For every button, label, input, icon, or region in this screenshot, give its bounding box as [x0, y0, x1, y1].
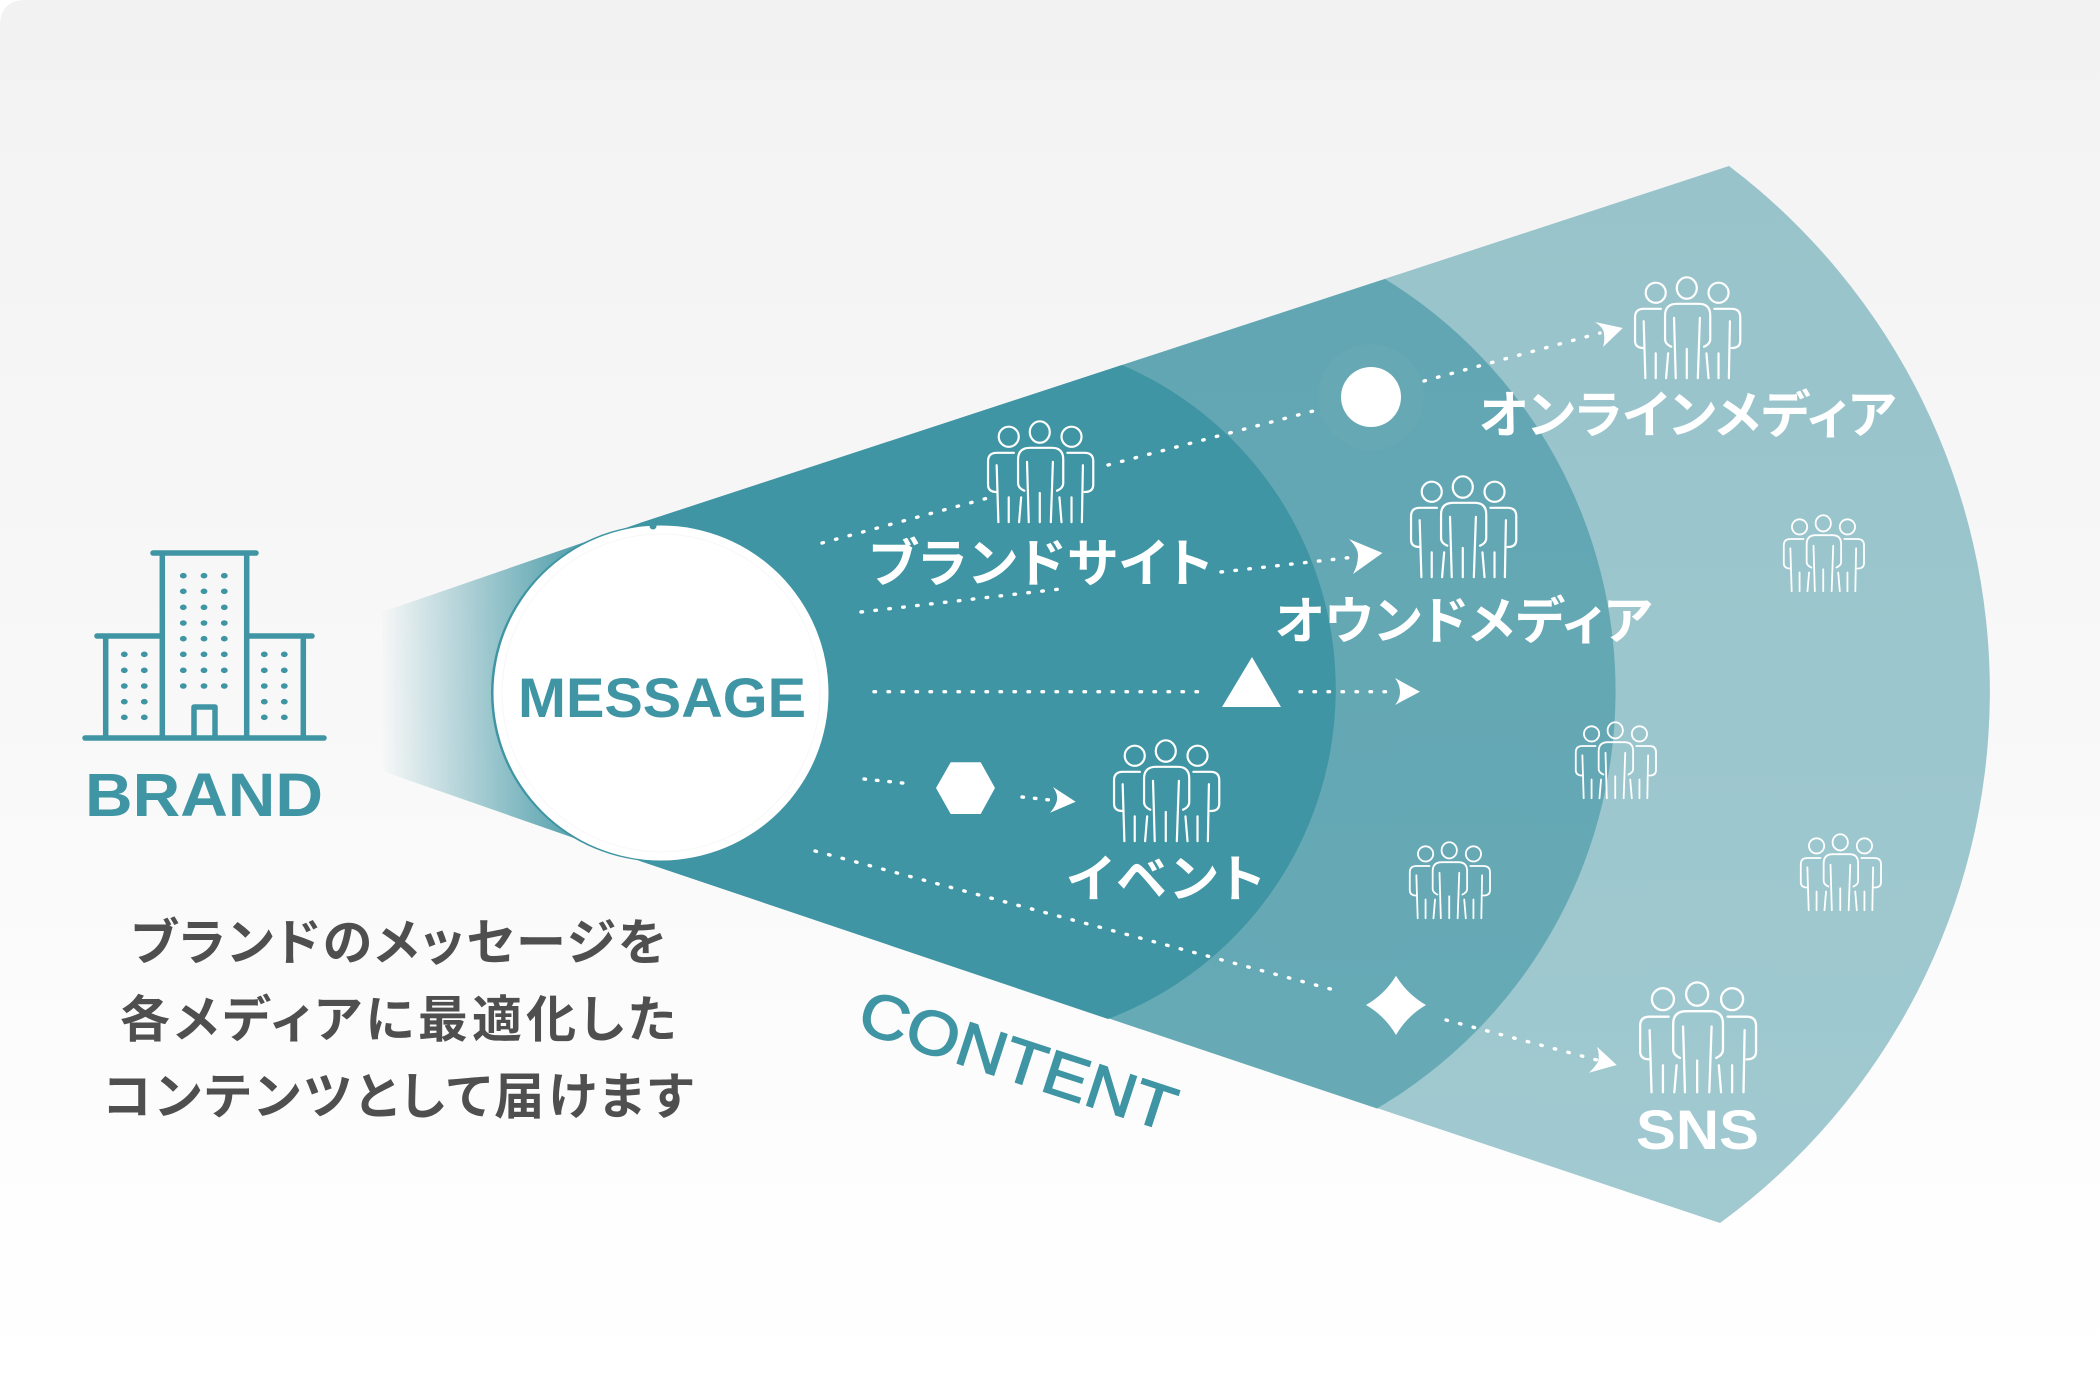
- fan: fading beam from brand to message: [382, 523, 640, 861]
- description text: 各メディアに最適化した: [120, 980, 676, 1052]
- icon: circle content with halo: [1318, 344, 1424, 450]
- arrow line: triangle to owned media: [874, 678, 1420, 705]
- people: small audience centre: [1576, 722, 1656, 798]
- fan: inner content band: [640, 365, 1336, 1019]
- message circle: MESSAGE: [518, 666, 806, 729]
- description text: コンテンツとして届けます: [103, 1057, 693, 1129]
- content label: CONTENT: [851, 978, 1185, 1145]
- label: online media: オンラインメディア: [1479, 374, 1896, 448]
- people: brand site audience: [988, 421, 1093, 522]
- label: event: イベント: [1067, 838, 1264, 912]
- label: owned media: オウンドメディア: [1275, 580, 1652, 654]
- arrow line: hexagon to event: [864, 779, 1076, 813]
- label: brand site: ブランドサイト: [869, 522, 1212, 597]
- people: small audience lower right: [1801, 834, 1881, 910]
- fan: outer audience band: [640, 166, 1990, 1223]
- arrow line: diamond path to sns: [815, 851, 1617, 1073]
- label: sns: SNS: [1636, 1098, 1759, 1161]
- icon: hexagon content: [936, 762, 995, 814]
- people: event audience: [1114, 740, 1219, 841]
- people: online media audience: [1635, 277, 1740, 378]
- description text: [103, 903, 693, 1129]
- people: small audience lower left: [1410, 842, 1490, 918]
- message circle: [491, 522, 828, 862]
- description text: ブランドのメッセージを: [131, 903, 666, 975]
- people: small audience upper right: [1784, 515, 1864, 591]
- brand label: BRAND: [85, 761, 323, 829]
- icon: triangle content: [1222, 657, 1281, 707]
- fan: middle media band: [640, 279, 1616, 1108]
- people: sns audience: [1640, 982, 1756, 1092]
- arrow line: to owned media: [861, 539, 1382, 612]
- icon: brand building: [85, 553, 324, 738]
- people: owned media audience: [1411, 476, 1516, 577]
- icon: diamond content: [1366, 976, 1426, 1035]
- arrow line: to online media: [822, 322, 1623, 543]
